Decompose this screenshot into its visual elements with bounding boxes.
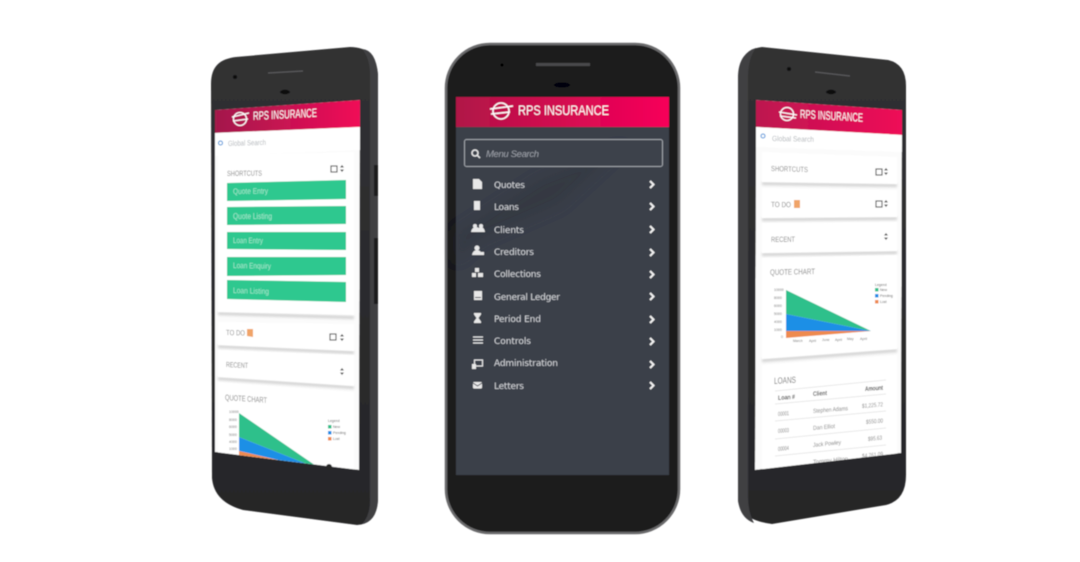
right chart month labels xyxy=(793,337,867,343)
centre logo xyxy=(490,103,513,119)
loans table header: Amount xyxy=(865,385,884,393)
left to do card: TO DO xyxy=(226,328,245,338)
right chart axis labels: 0 xyxy=(781,335,783,339)
left button: quote listing xyxy=(227,206,346,225)
menu item: general ledger: General Ledger xyxy=(494,293,560,303)
left phone speaker xyxy=(268,71,303,73)
left button: quote entry xyxy=(227,180,346,201)
right phone sensor xyxy=(826,90,836,94)
right chart legend: Legend xyxy=(875,283,887,287)
right chart month labels: April xyxy=(835,338,842,342)
right chart month labels: March xyxy=(793,339,803,343)
loans table header: Loan # xyxy=(778,394,795,402)
left chart legend: New xyxy=(333,425,340,429)
right loans card: LOANS xyxy=(774,375,796,386)
left button: loan entry xyxy=(227,232,346,250)
right phone camera xyxy=(787,67,791,71)
loans table rows: Jack Powley xyxy=(813,440,841,449)
left button: quote entry: Quote Entry xyxy=(233,187,268,196)
right shortcuts card: SHORTCUTS xyxy=(771,164,808,174)
left chart legend xyxy=(328,419,346,441)
centre screen xyxy=(456,97,669,475)
loans table rows: 00004 xyxy=(778,446,789,453)
right search bar xyxy=(756,127,902,152)
loans table rows: $550.00 xyxy=(866,418,884,426)
left chart axis labels xyxy=(229,410,239,451)
right brand name: RPS INSURANCE xyxy=(800,107,863,125)
centre phone sensor xyxy=(554,82,570,88)
left search bar xyxy=(217,126,361,150)
left button: quote listing: Quote Listing xyxy=(233,212,272,221)
right shortcuts card xyxy=(761,166,898,188)
menu item: quotes xyxy=(473,179,654,191)
menu item: controls: Controls xyxy=(494,337,531,347)
right chart legend: Pending xyxy=(880,294,893,298)
right chart legend xyxy=(875,283,893,304)
right loans card xyxy=(762,376,896,470)
phone: right xyxy=(738,47,906,524)
left button: loan listing: Loan Listing xyxy=(233,286,269,296)
right chart axis labels: 6000 xyxy=(774,304,782,308)
left chart legend: Lost xyxy=(333,437,340,441)
left button: loan enquiry: Loan Enquiry xyxy=(233,261,271,271)
menu item: quotes: Quotes xyxy=(494,181,525,191)
menu item: collections xyxy=(472,268,654,280)
right chart axis labels: 10000 xyxy=(774,288,784,292)
left logo xyxy=(232,112,249,126)
left quote chart card xyxy=(218,394,354,470)
loans table rows xyxy=(778,402,884,466)
right chart axis labels: 8000 xyxy=(774,296,782,300)
left screen xyxy=(215,100,360,480)
right chart axis labels: 5000 xyxy=(774,312,782,316)
right phone speaker xyxy=(815,72,850,76)
right quote chart card xyxy=(762,255,897,362)
menu item: general ledger xyxy=(474,291,654,303)
loans table rows: 00001 xyxy=(778,411,789,418)
right chart areas xyxy=(786,290,871,338)
phones wrapper xyxy=(211,44,906,533)
menu item: administration xyxy=(472,359,654,369)
left recent card xyxy=(217,362,355,390)
menu item: letters: Letters xyxy=(494,382,524,392)
left chart axis labels: 6000 xyxy=(229,425,237,429)
menu item: creditors: Creditors xyxy=(494,248,534,258)
left chart areas xyxy=(238,412,314,466)
left phone sensor xyxy=(280,90,290,94)
loans table rows: $95.63 xyxy=(868,436,882,443)
left header xyxy=(215,100,360,133)
loans table header xyxy=(778,385,884,400)
left button: loan enquiry xyxy=(227,257,346,276)
left chart axis labels: 4000 xyxy=(229,440,237,444)
right chart month labels: June xyxy=(822,338,830,342)
left to do card xyxy=(217,328,355,354)
left chart axis labels: 8000 xyxy=(229,418,237,422)
right chart axis labels: 4000 xyxy=(774,320,782,324)
menu item: controls xyxy=(473,337,654,347)
menu item: clients: Clients xyxy=(494,226,524,236)
centre brand name: RPS INSURANCE xyxy=(518,103,609,118)
left button: loan listing xyxy=(227,280,346,302)
loans table rows: Tommy Hilton xyxy=(813,457,848,466)
right chart month labels: May xyxy=(847,337,854,341)
phone: centre xyxy=(446,44,679,533)
left chart legend: Pending xyxy=(333,431,346,435)
loans table rows: Dan Elliot xyxy=(813,424,835,432)
left brand name: RPS INSURANCE xyxy=(253,106,317,123)
left home notch xyxy=(326,464,332,470)
right chart legend: Lost xyxy=(880,300,887,304)
left shortcuts card xyxy=(218,152,354,319)
menu item: letters xyxy=(473,382,654,392)
left quote chart card: QUOTE CHART xyxy=(225,393,267,405)
centre phone body xyxy=(446,44,679,533)
centre header xyxy=(456,97,669,127)
right recent card: RECENT xyxy=(771,235,795,244)
right search bar: Global Search xyxy=(772,134,814,144)
loans table rows: 00003 xyxy=(778,428,789,435)
loans table rows: $1,225.72 xyxy=(862,402,884,410)
right to do card xyxy=(761,200,898,222)
right chart legend: New xyxy=(880,288,887,292)
loans table rows: Stephen Adams xyxy=(813,406,848,415)
menu search box xyxy=(464,140,662,166)
right logo xyxy=(779,108,797,120)
left button: loan entry: Loan Entry xyxy=(233,236,263,245)
menu item: period end: Period End xyxy=(494,315,541,325)
centre phone speaker xyxy=(536,63,590,66)
left phone volume buttons xyxy=(374,165,378,304)
left phone side band xyxy=(362,49,378,524)
menu item: loans: Loans xyxy=(494,203,519,213)
menu item: collections: Collections xyxy=(494,270,541,280)
loans table rules xyxy=(775,380,886,456)
centre phone camera xyxy=(500,64,504,66)
menu search box: Menu Search xyxy=(486,149,539,160)
right header xyxy=(756,100,902,135)
left chart axis labels: 1000 xyxy=(229,447,237,451)
right recent card xyxy=(761,232,898,257)
left shortcuts card: SHORTCUTS xyxy=(227,169,262,178)
menu item: clients xyxy=(471,224,654,236)
menu item: loans xyxy=(474,201,654,213)
left chart axis labels: 5000 xyxy=(229,433,237,437)
right to do card: TO DO xyxy=(771,200,791,209)
menu item: administration: Administration xyxy=(494,359,558,369)
loans table rows: $4,761.09 xyxy=(862,452,884,460)
left chart legend: Legend xyxy=(328,419,340,423)
right phone body xyxy=(738,47,906,524)
loans table header: Client xyxy=(813,390,828,398)
menu item: period end xyxy=(474,313,654,325)
phone: left xyxy=(211,47,378,525)
right phone side band xyxy=(738,48,756,523)
left search bar: Global Search xyxy=(228,138,266,148)
right chart axis labels xyxy=(774,288,784,339)
left recent card: RECENT xyxy=(226,360,248,370)
right quote chart card: QUOTE CHART xyxy=(770,267,815,277)
right screen xyxy=(755,100,902,480)
right chart month labels: April xyxy=(860,337,867,341)
left chart axis labels: 10000 xyxy=(229,410,239,414)
menu item: creditors xyxy=(472,246,654,258)
left phone camera xyxy=(233,75,237,79)
right chart month labels: April xyxy=(809,339,816,343)
left phone body xyxy=(211,47,378,525)
right chart axis labels: 1000 xyxy=(774,328,782,332)
